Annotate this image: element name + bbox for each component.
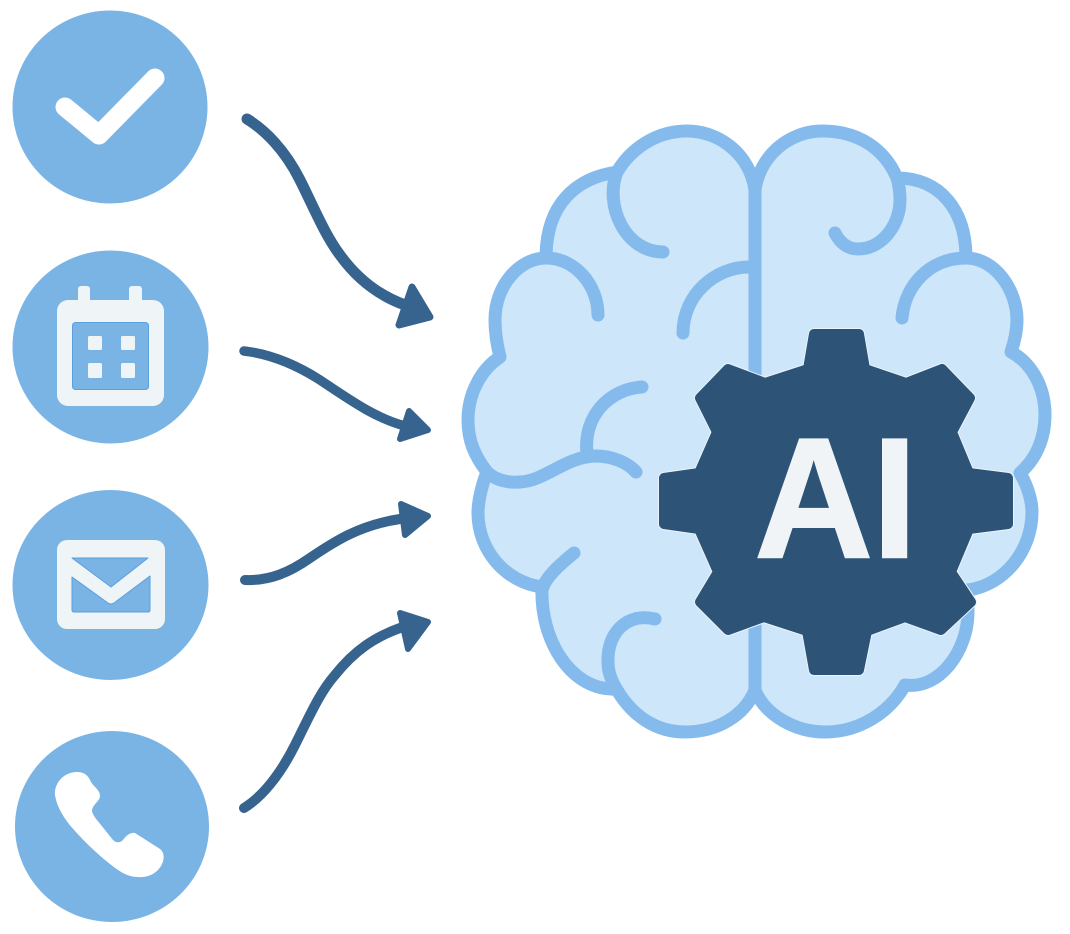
icon: phone circle	[15, 731, 209, 922]
icon: envelope circle	[12, 490, 208, 680]
brain outline	[468, 131, 1045, 732]
arrow: calendar to brain	[244, 351, 428, 439]
icon: check mark circle	[12, 10, 208, 204]
arrow: envelope to brain	[245, 504, 428, 580]
gear label: AI	[754, 401, 918, 594]
arrow: check to brain	[247, 119, 430, 325]
brain folds	[487, 172, 966, 695]
icon: calendar circle	[12, 250, 208, 444]
icon: AI gear	[664, 334, 1008, 670]
brain illustration	[468, 131, 1045, 732]
arrow: phone to brain	[244, 613, 428, 808]
